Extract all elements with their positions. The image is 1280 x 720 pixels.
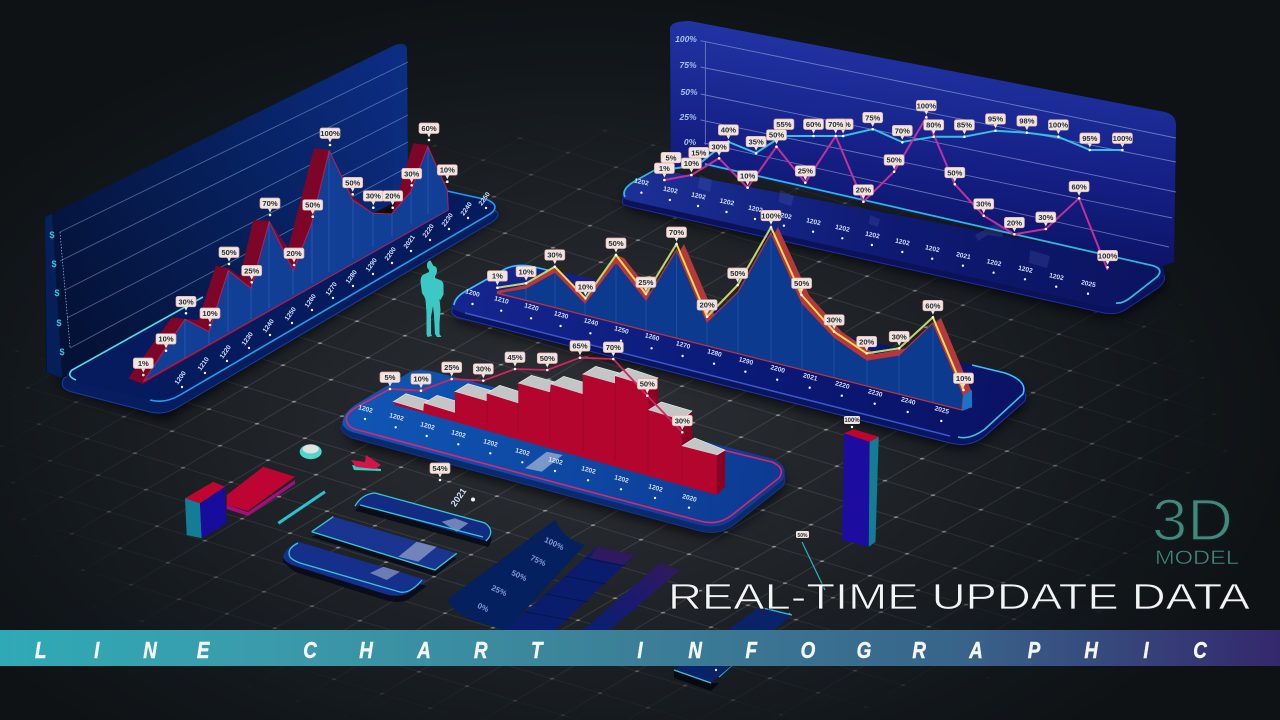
platform magenta edge [346,389,781,523]
platform cyan edges [624,164,1160,303]
value labels: 70% [606,343,621,352]
icon: small box [185,482,227,538]
value labels [380,341,692,434]
y axis labels: 75% [679,60,697,70]
icon: red arrow [351,455,381,471]
x axis labels: 2021 [955,251,972,261]
x axis labels [633,178,1097,295]
value labels: 98% [1019,117,1035,126]
value labels: 25% [798,167,813,176]
value labels: 20% [699,301,715,310]
value labels: 1% [138,359,149,368]
panel: dual line chart top right [622,21,1176,318]
axis wall piece [447,520,585,632]
x axis labels: 2250 [478,191,492,207]
x axis labels: 2240 [900,396,916,407]
value labels: 10% [440,166,455,175]
value labels [133,123,457,376]
value labels: 100% [1049,121,1068,130]
x axis labels: 1250 [613,325,630,336]
y axis labels: 100% [675,34,697,44]
tall 3D bar: 100% [844,418,860,424]
value labels: 10% [202,309,218,318]
value labels: 40% [721,126,736,135]
value labels: 60% [421,124,437,133]
y axis currency markers: $ [59,347,65,357]
banner: LINE CHART INFOGRAPHIC [35,637,1207,664]
magenta data line [390,358,682,432]
x axis labels: 1200 [174,370,188,386]
value labels: 25% [244,266,260,275]
x axis labels: 2025 [934,405,950,416]
connector callout line: 50% [797,533,808,539]
platform front edge [465,313,950,436]
red extrusion [128,143,448,384]
icon: disc [300,444,322,459]
value labels: 30% [404,169,420,178]
x axis labels: 2230 [867,388,883,399]
value labels: 20% [859,337,875,346]
value labels: 30% [178,297,194,306]
x axis labels: 1210 [197,356,211,372]
platform surface [342,370,785,526]
y axis currency markers: $ [56,318,62,328]
yellow data line [497,227,964,390]
value labels: 100% [917,101,936,110]
red ribbon [497,227,972,408]
x axis labels: 1202 [776,211,793,221]
value labels: 10% [740,172,755,181]
wall segment purple [583,563,680,632]
chart wall [670,21,1176,268]
value labels: 50% [221,248,237,257]
x axis labels: 1290 [738,356,754,367]
value labels: 10% [684,159,699,168]
value labels: 50% [305,201,321,210]
x axis labels: 1280 [706,348,723,359]
value labels: 95% [988,115,1003,124]
x axis labels: 1202 [647,483,664,494]
value labels: 50% [345,178,361,187]
value labels: 10% [578,282,593,291]
axis wall piece: 50% [510,568,528,583]
x axis labels [464,288,950,422]
value labels: 20% [1007,218,1022,227]
value labels: 80% [926,121,942,130]
y axis labels: 25% [678,112,697,122]
x axis labels: 2025 [1080,279,1097,289]
value labels: 50% [540,354,555,363]
value labels: 95% [1082,134,1098,143]
blue area [143,147,448,382]
x axis labels: 1202 [1017,265,1034,275]
value labels: 70% [669,228,684,237]
value labels: 25% [444,363,460,372]
value labels: 10% [518,267,534,276]
heading: real-time update data: REAL-TIME UPDATE DATA [668,576,1250,617]
bar top faces [393,366,725,455]
x axis labels: 1202 [805,217,822,227]
y axis labels: 0% [684,137,697,147]
x axis labels: 1200 [464,288,481,299]
value labels: 85% [957,121,972,130]
x axis labels: 1202 [419,421,436,432]
area column lines [185,147,428,358]
x axis labels: 1202 [357,404,374,415]
bar front faces [393,374,717,495]
value labels: 60% [806,120,821,129]
y axis currency markers [49,230,70,357]
panel: red bar chart [341,341,785,536]
x axis labels: 1202 [690,192,707,202]
x axis labels: 1270 [325,281,339,297]
icon: flat red slab [227,467,295,516]
x axis labels: 1202 [834,224,851,234]
platform piece bottom [283,542,427,602]
platform piece middle [312,517,457,576]
x axis labels: 1290 [365,257,379,273]
value labels: 70% [835,120,851,129]
value labels: 1% [659,164,670,173]
value labels: 30% [892,332,907,341]
floor grid [0,130,1226,716]
axis wall piece: 100% [543,535,565,552]
value labels: 1% [492,272,503,281]
callout: 54 percent: 54% [432,464,448,473]
value labels: 30% [366,192,381,201]
year label 2021: 2021 [449,486,468,508]
x axis labels: 1210 [493,295,510,306]
low platform piece [674,607,792,691]
panel: loose 3D components [185,416,879,691]
x axis labels: 1202 [747,205,764,215]
value labels: 20% [385,192,401,201]
value labels: 55% [776,120,792,129]
x axis labels: 1250 [284,306,298,322]
x axis labels: 2020 [681,493,698,504]
x axis labels: 1260 [644,332,660,343]
value labels: 100% [1113,134,1132,143]
platform rim [341,376,785,532]
panel: area chart center [452,210,1026,448]
chart wall [45,44,408,378]
cyan data line [664,129,1122,173]
tall 3D bar [842,416,879,547]
y axis currency markers: $ [51,259,57,269]
value labels: 30% [1038,213,1054,222]
value labels: 50% [730,269,746,278]
value labels: 20% [286,249,302,258]
x axis labels: 1220 [219,344,233,360]
value labels: 60% [1071,182,1087,191]
connector callout line [719,531,825,677]
value labels: 50% [947,168,963,177]
platform piece top [355,493,492,547]
value labels: 70% [828,120,844,129]
gridlines [701,41,1176,247]
value labels: 30% [711,142,727,151]
x axis labels: 1202 [547,456,564,467]
value labels: 30% [675,416,690,425]
value labels: 10% [413,375,429,384]
value labels: 50% [886,156,902,165]
platform rim [62,197,498,413]
platform neon edges [454,265,1024,438]
value labels: 50% [769,131,784,140]
value labels [654,100,1132,269]
axis wall piece: 75% [529,553,547,568]
x axis labels: 1220 [523,302,540,313]
low platform piece: 1202 [708,658,725,668]
banner [0,630,1280,666]
value labels: 65% [572,342,588,351]
blue area [497,233,964,410]
x axis labels: 1202 [864,231,881,241]
value labels: 70% [262,199,278,208]
icon: person silhouette [420,260,444,337]
value labels: 100% [320,129,340,138]
x axis labels: 2220 [834,380,850,391]
heading: 3D model badge [1152,488,1239,569]
x axis labels: 1202 [388,412,405,423]
value labels: 30% [976,200,992,209]
platform surface [622,170,1165,308]
x axis labels: 1260 [304,293,318,309]
value labels: 50% [640,380,655,389]
value labels: 35% [748,137,764,146]
area column lines [526,233,933,402]
x axis labels: 1202 [662,186,679,196]
platform surface [66,190,496,401]
platform neon edges [70,297,203,380]
callout: 54 percent [430,463,450,481]
x axis labels: 1202 [514,447,531,458]
x axis labels: 1202 [894,238,911,248]
value labels: 50% [794,279,809,288]
value labels: 30% [547,251,563,260]
platform rim [622,176,1165,314]
value labels: 30% [476,365,491,374]
value labels [487,210,974,391]
value labels: 30% [827,316,842,325]
area end cap [962,390,972,411]
bar dividers [455,383,682,480]
reflection marks [698,175,1050,268]
value labels: 70% [895,126,910,135]
heading: 3D model badge: MODEL [1155,547,1239,569]
axis wall piece: 0% [476,601,490,614]
x axis labels: 1230 [241,331,255,347]
value labels: 10% [158,335,174,344]
x axis labels: 2021 [403,234,417,250]
x axis labels: 2021 [802,372,818,383]
value labels: 100% [761,211,781,220]
x axis labels: 2220 [422,223,436,239]
x axis labels: 1202 [1048,272,1065,282]
y axis labels [675,34,698,147]
axis wall piece: 25% [490,583,508,598]
value labels: 100% [1098,251,1118,260]
x axis labels: 1240 [583,317,599,328]
x axis labels: 1270 [675,340,691,351]
x axis labels: 1202 [450,429,467,440]
wall edge strips [45,44,408,378]
platform rim [452,270,1026,444]
x axis labels: 1202 [924,244,941,254]
x axis labels [174,191,492,388]
value labels: 5% [385,373,396,382]
y axis currency markers: $ [49,230,55,240]
x axis labels: 1202 [580,465,597,476]
panel: area chart left [45,44,500,420]
x axis labels: 2200 [384,246,398,262]
x axis labels: 1230 [553,310,569,321]
x axis labels: 1202 [719,198,735,208]
selection patch [525,452,563,472]
platform surface [452,264,1026,438]
x axis labels: 2240 [460,201,474,217]
x axis labels: 1202 [482,438,499,449]
value labels: 75% [865,113,881,122]
y axis labels: 50% [680,87,698,97]
x axis labels: 2200 [770,364,786,375]
value labels: 15% [691,148,707,157]
bar side faces [648,378,725,495]
value labels: 50% [608,239,624,248]
x axis labels: 2230 [441,212,455,228]
value labels: 45% [507,353,523,362]
heading: 3D model badge: 3D [1152,488,1233,553]
x axis labels: 1240 [262,318,276,334]
icon: cyan bar [278,492,325,523]
wall gridlines [60,62,408,348]
value labels: 60% [925,301,941,310]
x axis labels: 1202 [986,258,1002,268]
x axis labels: 1280 [345,269,359,285]
platform front edge [150,191,495,401]
value labels: 5% [666,153,677,162]
value labels: 20% [856,186,871,195]
value labels: 25% [638,278,654,287]
magenta data line [664,117,1108,270]
x axis labels: 1202 [613,474,630,485]
x axis labels: 1202 [633,178,650,188]
green rising segments [497,227,933,353]
value labels: 10% [956,374,971,383]
y axis currency markers: $ [54,288,60,298]
x axis labels [357,404,698,509]
wall segment blue [503,547,635,632]
